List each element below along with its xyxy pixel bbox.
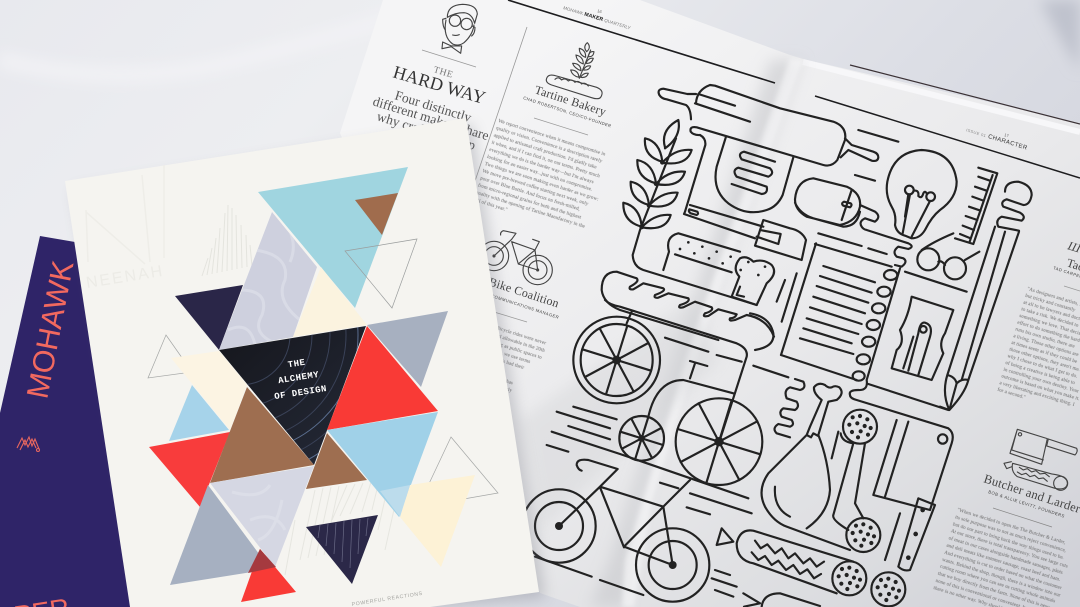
baguette [602, 272, 774, 340]
Tartine Bakery body copy: fall of this year." [473, 198, 508, 213]
maker body copy: outcome is based on what you make it. [1001, 374, 1080, 402]
slate bottom triangle [170, 485, 262, 585]
ruler [922, 168, 997, 250]
dark red overlap [248, 549, 276, 573]
embossed Neenah mark [85, 165, 165, 292]
divider under Butcher byline [993, 508, 1052, 527]
right page section: Butcher and Larder [933, 429, 1080, 607]
maker body copy [997, 287, 1080, 416]
lower page shadow folds [520, 300, 720, 530]
second sausage bottom [743, 593, 820, 607]
small brown triangle [355, 193, 398, 235]
lavender wood panel bottom [210, 466, 314, 567]
magazine spread [340, 0, 1080, 607]
cream left polygon [171, 351, 247, 430]
navy bottom triangle [306, 515, 378, 584]
booklet title MOHAWK: MOHAWK [20, 258, 80, 401]
Bike Coalition body copy: our- [475, 410, 485, 417]
article subhead: different makers share [371, 94, 491, 143]
maker body copy: a living. Those other options are [1013, 334, 1080, 358]
lavender wood-grain panel [219, 212, 317, 350]
maker body copy: those other options, they aren't me. [1009, 348, 1080, 373]
navy triangle [175, 285, 243, 350]
Bike Coalition body copy: spaces [478, 402, 492, 411]
Butcher and Larder body copy: but do our part to bring back the way things used to be. [952, 522, 1064, 561]
Bike Coalition body copy: along as public spaces to [491, 340, 543, 361]
Butcher and Larder body copy: its sole purpose was to not as much reject convenience, [954, 515, 1067, 554]
Tartine Bakery body copy: pour over Blue Bottle. And focus on fresh-milled, [479, 176, 580, 213]
Bike Coalition body copy: years, as has [487, 374, 513, 386]
article title HARD WAY: HARD WAY [391, 62, 488, 108]
rolling pin [659, 85, 878, 238]
speed lines [547, 407, 752, 514]
left wireframe triangle [148, 335, 192, 378]
cover title: OF DESIGN [274, 384, 328, 402]
mixer hook [732, 152, 775, 194]
spine fold shading [590, 58, 803, 607]
divider under man icon [422, 50, 476, 67]
Butcher and Larder body copy: cutting room where you can see us cutting whole animals [939, 565, 1056, 605]
Tartine Bakery body copy: it when, and if I can find it, on our terms. Pretty much [491, 141, 601, 180]
maker body copy: of being a creative is being able to [1005, 361, 1076, 386]
left page number: 16 [597, 8, 603, 14]
maker body copy: a very liberating and exciting thing. I [999, 381, 1075, 408]
divider under Bike Coalition byline [494, 312, 527, 322]
Tartine Bakery heading: Tartine Bakery [533, 83, 608, 119]
Tartine Bakery byline: CHAD ROBERTSON, CEO/CO-FOUNDER [523, 95, 612, 129]
cover of The Alchemy of Design [65, 118, 539, 607]
icon: Mohawk logo [17, 437, 40, 452]
pale blue triangle [169, 385, 229, 441]
maker body copy: runs his own studio, there are [1015, 327, 1076, 350]
pencil sharpener [892, 297, 953, 380]
cover title: ALCHEMY [278, 370, 320, 386]
notebook [781, 243, 892, 355]
page edge band [803, 62, 1080, 132]
right running header: ISSUE 01 CHARACTER [965, 127, 1028, 152]
wireframe triangle top right [345, 239, 417, 308]
Bike Coalition body copy: spending [480, 395, 500, 406]
line art illustration: pencil [940, 227, 1019, 410]
Butcher and Larder body copy: At our store, there is total transparency. You see large cuts [950, 529, 1068, 570]
salami [717, 528, 905, 606]
page surface [340, 0, 1080, 607]
maker body copy: to take a risk. We decided to [1020, 307, 1079, 329]
right page top edge [850, 65, 1080, 124]
notebook lower edge [781, 338, 948, 410]
pizza wheel [573, 317, 660, 403]
eyeglasses [917, 248, 979, 279]
red left triangle [149, 432, 230, 507]
Tartine Bakery body copy: from micro-regional grains for both and the highest [477, 184, 582, 221]
brown right triangle [306, 433, 367, 489]
cover title: THE [287, 358, 306, 370]
wood black triangle [219, 326, 366, 465]
Tartine Bakery body copy: applied to artisanal craft production. I'd gladly take [493, 133, 598, 171]
purple Mohawk booklet [0, 236, 170, 607]
slate triangle [367, 311, 448, 387]
Tartine Bakery body copy: everything we do is the harder way—but I'm always [488, 148, 594, 185]
light bulb [887, 150, 957, 238]
Bike Coalition body copy: Today, we use terms [489, 348, 531, 365]
Bike Coalition body copy: been having [482, 388, 508, 401]
icon: cleaver and salami [1004, 429, 1077, 490]
right page number: 17 [1004, 132, 1010, 138]
cleaver [885, 422, 947, 570]
Bike Coalition body copy [470, 326, 548, 429]
maker body copy: at times seem as if they could be [1011, 341, 1078, 365]
baguette tail and long rail [605, 300, 788, 442]
squiggle line [775, 379, 804, 437]
Tartine Bakery body copy: looking for an easier way...just with no compromise. [486, 155, 593, 193]
Butcher and Larder body copy: "When we decided to open the The Butcher & Larder, [956, 508, 1066, 546]
loaf of bread [663, 233, 740, 272]
maker body copy: effort to do something the hard [1016, 321, 1080, 344]
shadow under cover [74, 124, 545, 607]
column divider [473, 27, 527, 187]
Bike Coalition byline: COMMUNICATIONS MANAGER [491, 293, 560, 320]
article kicker THE: THE [432, 65, 454, 81]
Butcher and Larder body copy: And everything is cut to order based on what the customer [943, 551, 1062, 591]
computer mouse with wire [795, 178, 860, 227]
maker body copy: in controlling your own destiny. Your [1003, 368, 1080, 395]
embossed Neenah mark: NEENAH [85, 263, 165, 292]
Butcher and Larder body copy: wants. Behind the shop, though, there is a window into our [941, 558, 1061, 599]
red bottom triangle [241, 549, 296, 602]
Butcher and Larder body copy: and deli meats like summer sausage, roast beef and ham. [946, 544, 1061, 583]
Bike Coalition heading: Bike Coalition [487, 275, 561, 310]
maker body copy: but tricky and constantly [1024, 294, 1076, 314]
chicken drumstick [762, 384, 850, 550]
brown large triangle [210, 387, 314, 483]
stand mixer bowl [716, 137, 793, 212]
Butcher and Larder byline: BOB & ALLIE LEVITT, FOUNDERS [988, 489, 1065, 519]
left running header: MOHAWK MAKER QUARTERLY [562, 5, 631, 31]
wheat stalk [623, 120, 757, 305]
embossed stripe band bottom [285, 481, 395, 575]
left page header rule [508, 0, 775, 83]
Tartine Bakery body copy: We report convenience when it means compromise in [497, 119, 606, 158]
teal triangle [258, 167, 408, 308]
Bike Coalition body copy: and allowable in the 20th [493, 333, 546, 354]
Tartine Bakery body copy: quality with the opening of Tartine Manufactory in the [475, 191, 586, 230]
tricycle [619, 361, 762, 485]
overlap blue cream [380, 485, 410, 517]
sausage links [832, 410, 880, 552]
right wireframe triangle [418, 437, 498, 507]
pencil top eraser [997, 182, 1032, 231]
bicycle [522, 460, 737, 602]
maker body copy: for a second." [997, 388, 1026, 401]
line art illustration: upper half [602, 85, 1032, 355]
Bike Coalition body copy: and regularly [484, 381, 513, 394]
article subhead: why craftsmanship [375, 109, 478, 153]
right page section: Tacoma maker [997, 238, 1080, 416]
Tartine Bakery body copy: We move pre-brewed coffee starting next week, only [482, 169, 589, 207]
Butcher and Larder body copy: of meat in our cases alongside handmade sausages, pâtés [948, 536, 1063, 576]
Butcher and Larder body copy [933, 508, 1076, 607]
Bike Coalition body copy: Bicycle rides were never [495, 326, 547, 347]
red large triangle [327, 326, 438, 430]
icon: bicycle small [479, 231, 552, 285]
embossed stripe triangle top [202, 205, 252, 276]
divider under maker byline [1064, 286, 1080, 291]
Butcher and Larder heading: Butcher and Larder [982, 472, 1080, 516]
Tartine Bakery body copy [473, 119, 612, 238]
short dash lines [777, 130, 898, 322]
icon: man with glasses and bow tie [442, 4, 477, 53]
Tartine Bakery body copy: quality or vision. Convenience is a description rarely [495, 126, 603, 165]
icon: bread with wheat [546, 43, 602, 99]
blue right triangle [327, 412, 438, 517]
cream right polygon [400, 475, 475, 567]
line art illustration: lower half [522, 268, 953, 607]
notebook spiral binding [850, 268, 953, 510]
maker body copy: why I chose to do what I get to do. [1007, 354, 1078, 380]
Bike Coalition body copy: to what's had their [486, 355, 525, 371]
divider under byline [534, 118, 588, 135]
butter knife handle [689, 205, 806, 260]
Tartine Bakery body copy: Two things we are soon making even harder as we grow: [484, 162, 599, 203]
cream triangle [293, 267, 367, 337]
toast slice [732, 257, 774, 305]
right page header rule [815, 96, 1080, 178]
cover sheet [65, 118, 539, 607]
cover title [274, 358, 328, 402]
article subhead: Four distinctly [393, 88, 473, 125]
